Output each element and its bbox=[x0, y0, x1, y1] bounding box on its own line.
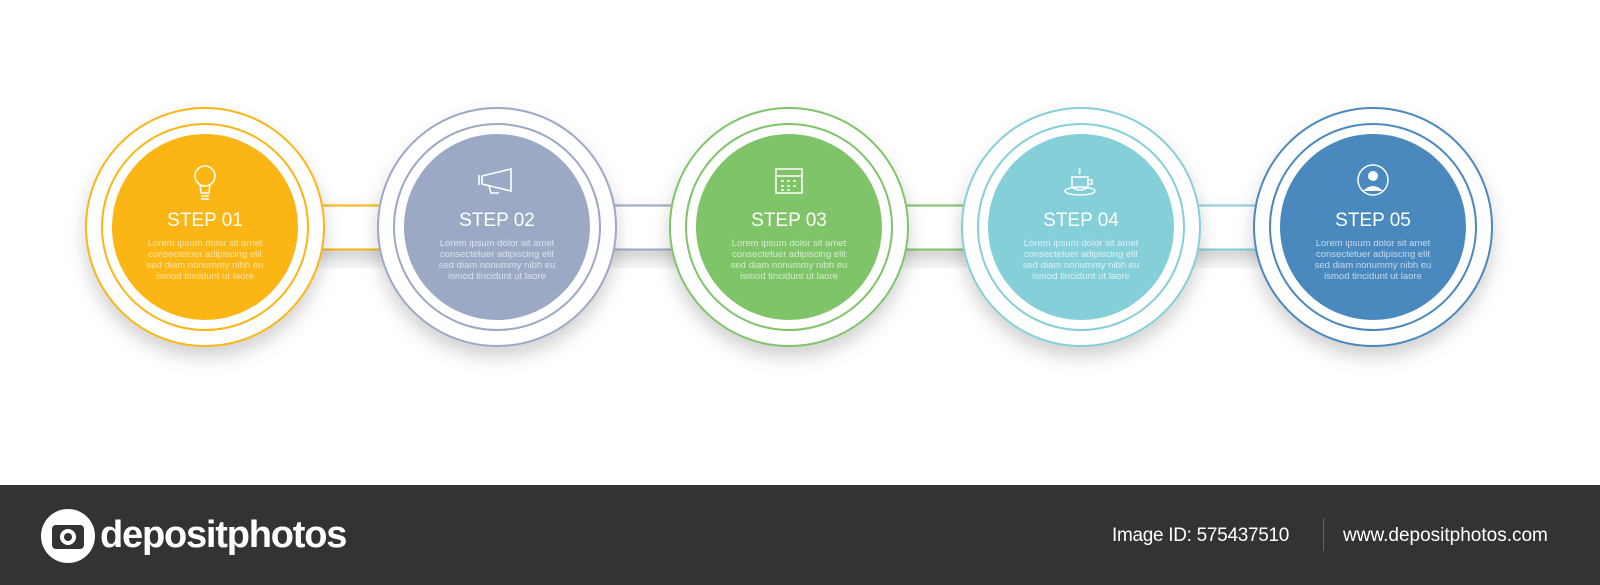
logo: depositphotos bbox=[100, 514, 346, 556]
step 05: sed diam nonummy nibh eu bbox=[1315, 260, 1431, 271]
icon: calendar bbox=[776, 169, 802, 193]
step 04 bbox=[962, 108, 1200, 346]
image id: Image ID: 575437510 bbox=[1112, 525, 1289, 546]
step 03: STEP 03 bbox=[751, 210, 827, 231]
step 03: consectetuer adipiscing elit bbox=[732, 249, 846, 260]
step 02: STEP 02 bbox=[459, 210, 535, 231]
step 04: ismod tincidunt ut laore bbox=[1032, 271, 1130, 282]
icon: megaphone bbox=[479, 169, 511, 193]
logo bbox=[41, 509, 346, 563]
step 01: ismod tincidunt ut laore bbox=[156, 271, 254, 282]
step 01: sed diam nonummy nibh eu bbox=[147, 260, 263, 271]
icon: light bulb bbox=[195, 166, 215, 199]
icon: coffee cup bbox=[1065, 168, 1095, 195]
step 01: STEP 01 bbox=[167, 210, 243, 231]
step 05: Lorem ipsum dolor sit amet bbox=[1316, 238, 1431, 249]
step 02: sed diam nonummy nibh eu bbox=[439, 260, 555, 271]
step 05: ismod tincidunt ut laore bbox=[1324, 271, 1422, 282]
step 05: STEP 05 bbox=[1335, 210, 1411, 231]
connector: 3-4 bbox=[894, 205, 984, 250]
step 01: consectetuer adipiscing elit bbox=[148, 249, 262, 260]
connector: 4-5 bbox=[1186, 205, 1276, 250]
step 05: consectetuer adipiscing elit bbox=[1316, 249, 1430, 260]
step 04: sed diam nonummy nibh eu bbox=[1023, 260, 1139, 271]
connector: 1-2 bbox=[310, 205, 400, 250]
connector: 2-3 bbox=[602, 205, 692, 250]
website: www.depositphotos.com bbox=[1343, 525, 1548, 546]
step 03: Lorem ipsum dolor sit amet bbox=[732, 238, 847, 249]
step 04: Lorem ipsum dolor sit amet bbox=[1024, 238, 1139, 249]
step 02: ismod tincidunt ut laore bbox=[448, 271, 546, 282]
step 02 bbox=[378, 108, 616, 346]
step 03: ismod tincidunt ut laore bbox=[740, 271, 838, 282]
icon: person bbox=[1358, 165, 1388, 195]
step 01: Lorem ipsum dolor sit amet bbox=[148, 238, 263, 249]
step 04: consectetuer adipiscing elit bbox=[1024, 249, 1138, 260]
step 02: consectetuer adipiscing elit bbox=[440, 249, 554, 260]
step 01 bbox=[86, 108, 324, 346]
step 03 bbox=[670, 108, 908, 346]
footer bar bbox=[0, 485, 1600, 585]
step 02: Lorem ipsum dolor sit amet bbox=[440, 238, 555, 249]
step 03: sed diam nonummy nibh eu bbox=[731, 260, 847, 271]
step 05 bbox=[1254, 108, 1492, 346]
step 04: STEP 04 bbox=[1043, 210, 1119, 231]
